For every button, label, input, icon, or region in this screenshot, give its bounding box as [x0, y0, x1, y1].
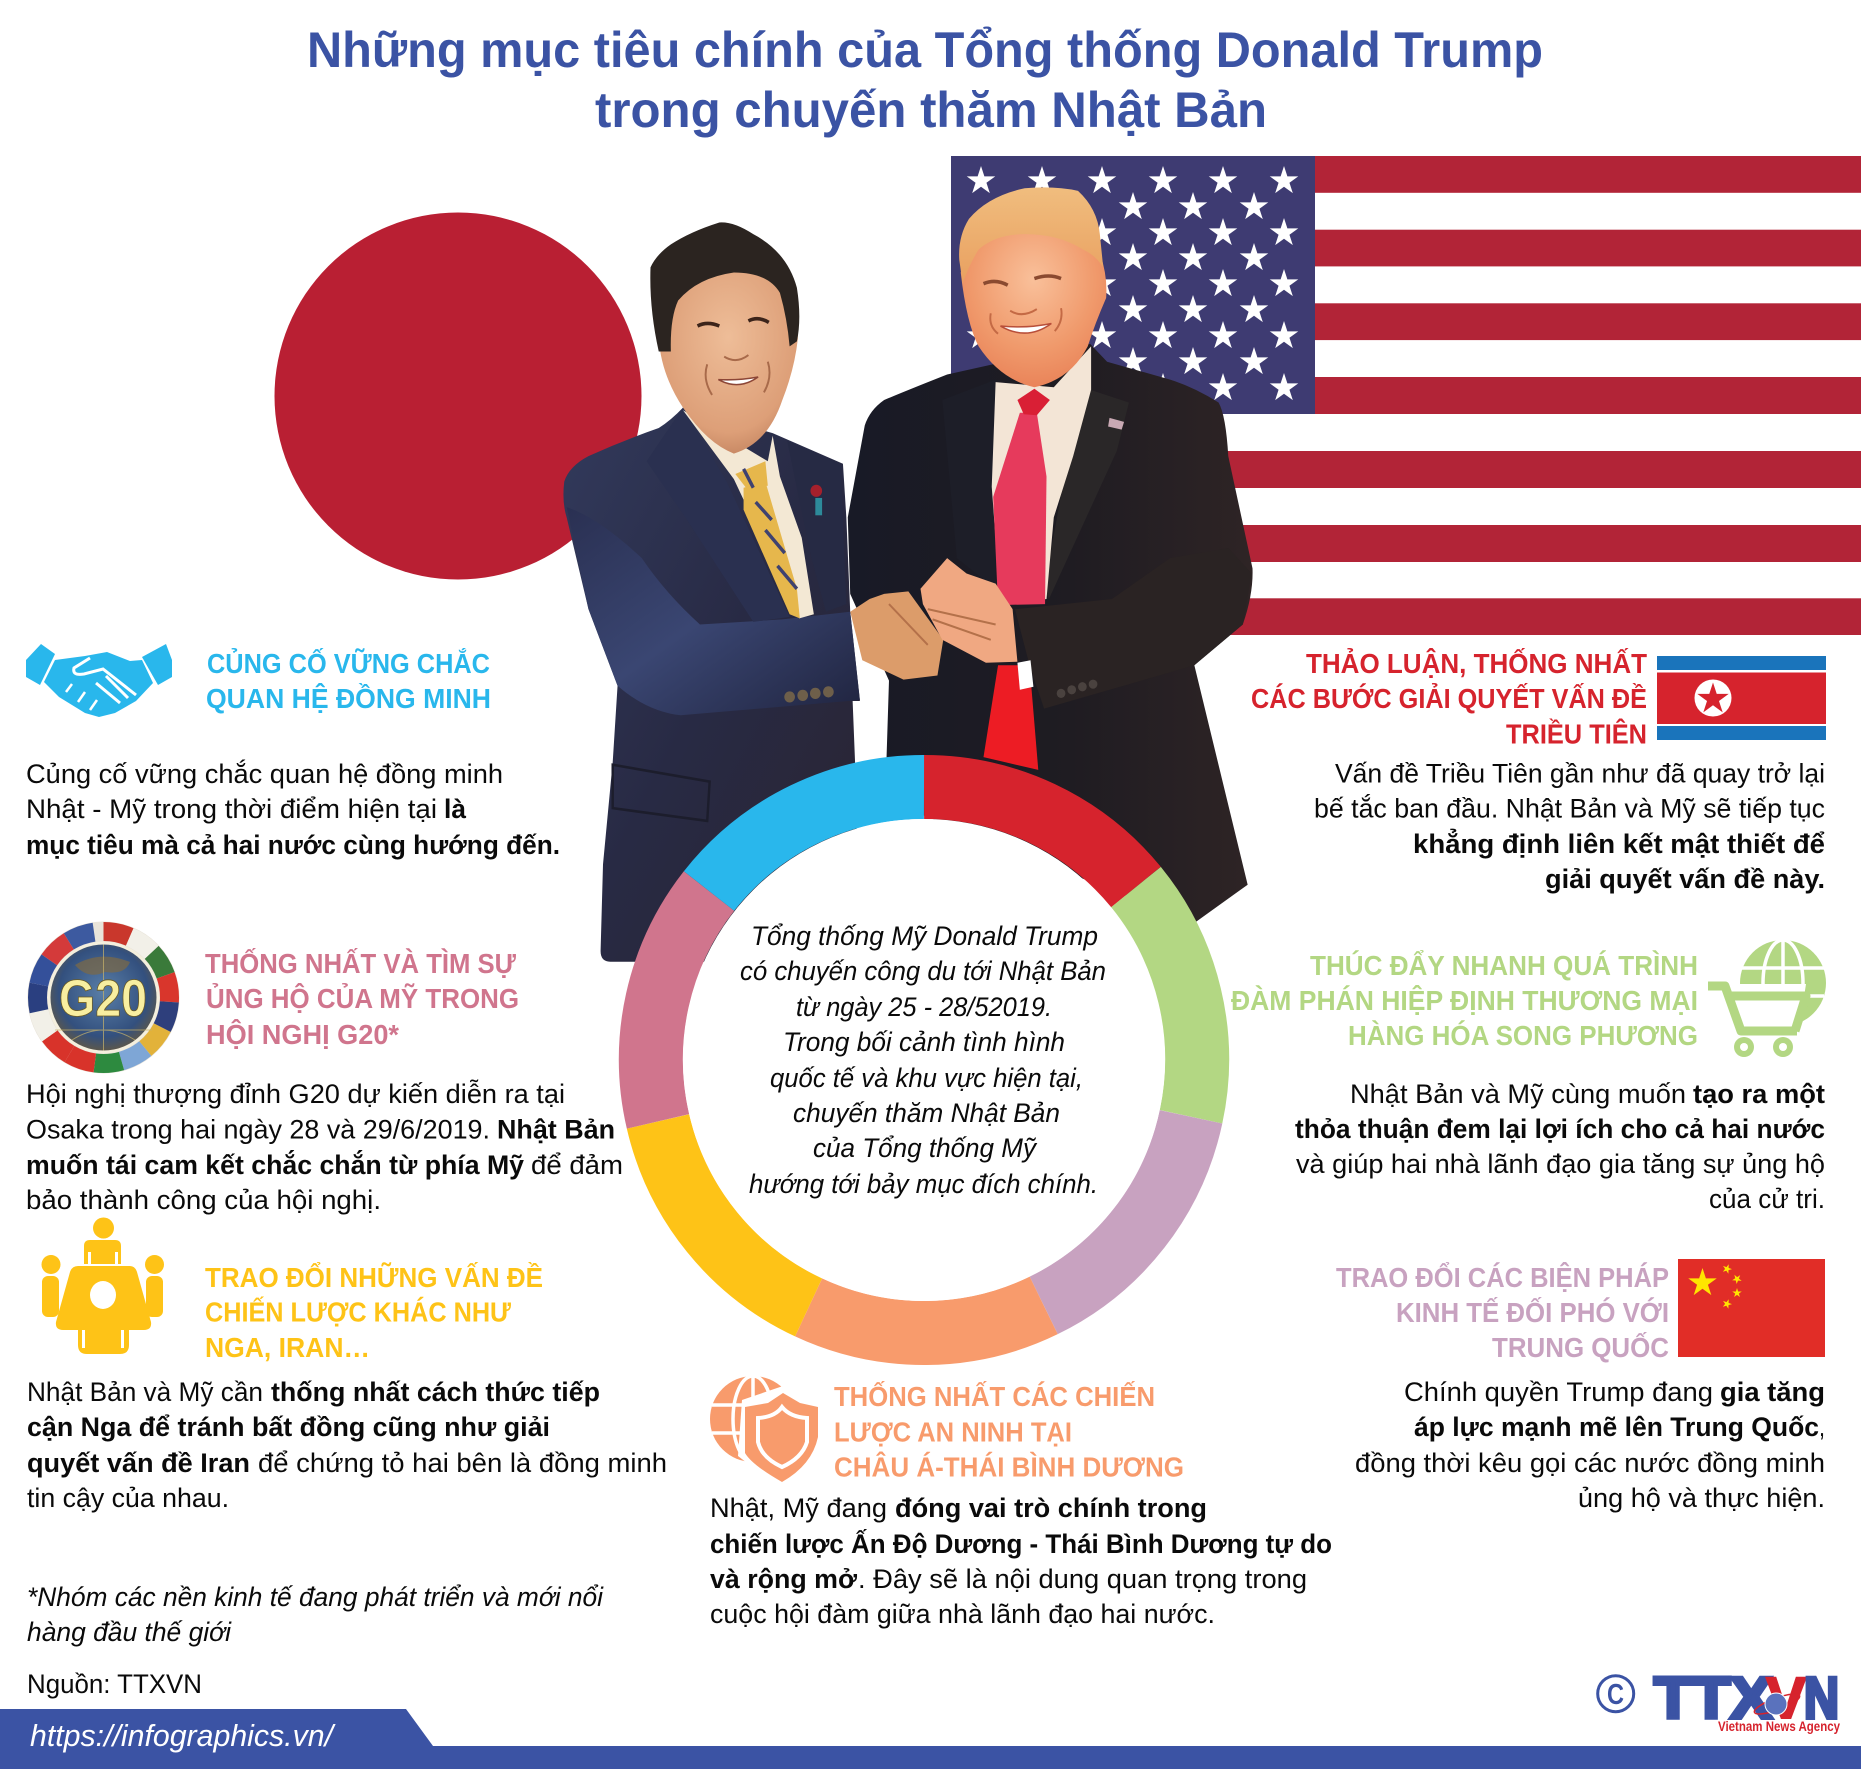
text block: centre intro: của Tổng thống Mỹ: [813, 1133, 1037, 1163]
panel: security goal: [710, 1376, 1332, 1629]
text block: trade: thỏa thuận đem lại lợi ích cho cả hai nước: [1295, 1114, 1825, 1144]
text block: North Korea: giải quyết vấn đề này.: [1545, 864, 1825, 894]
heading: trade: THÚC ĐẨY NHANH QUÁ TRÌNH: [1310, 950, 1698, 981]
heading: alliance: [206, 647, 491, 714]
logo: TTXVN: TTX: [1654, 1666, 1772, 1731]
text block: China: đồng thời kêu gọi các nước đồng minh: [1355, 1448, 1825, 1478]
text block: centre intro: [740, 921, 1106, 1199]
text block: China: Chính quyền Trump đang: [1404, 1377, 1713, 1407]
heading: strategic issues: CHIẾN LƯỢC KHÁC NHƯ: [205, 1296, 512, 1328]
heading: North Korea: TRIỀU TIÊN: [1506, 718, 1647, 750]
heading: trade: HÀNG HÓA SONG PHƯƠNG: [1348, 1020, 1698, 1051]
heading: China: [1336, 1262, 1669, 1363]
text block: G20: để đảm: [531, 1150, 623, 1180]
text block: G20: bảo thành công của hội nghị.: [26, 1185, 381, 1215]
source: Nguồn: TTXVN: [27, 1669, 202, 1699]
text block: G20: Hội nghị thượng đỉnh G20 dự kiến diễn ra tại: [26, 1078, 565, 1109]
text block: G20: [26, 1078, 623, 1215]
text block: alliance: là: [444, 794, 467, 824]
title: Những mục tiêu chính của Tổng thống Donald Trump: [307, 22, 1543, 78]
text block: alliance: mục tiêu mà cả hai nước cùng hướng đến.: [26, 830, 560, 860]
illustration: two leaders shaking hands: [563, 187, 1253, 962]
heading: China: TRUNG QUỐC: [1492, 1331, 1669, 1363]
heading: security: LƯỢC AN NINH TẠI: [834, 1416, 1072, 1448]
icon: North Korean flag: [1657, 656, 1826, 740]
text block: strategic issues: quyết vấn đề Iran: [27, 1448, 250, 1478]
text block: security: chiến lược Ấn Độ Dương - Thái Bình Dương tự do: [710, 1528, 1332, 1559]
logo: TTXVN: C: [1607, 1679, 1624, 1711]
text block: China: ,: [1819, 1412, 1825, 1442]
text block: centre intro: Trong bối cảnh tình hình: [783, 1027, 1065, 1057]
heading: alliance: CỦNG CỐ VỮNG CHẮC: [207, 647, 490, 679]
icon: handshake: [26, 644, 172, 717]
text block: trade: tạo ra một: [1693, 1079, 1825, 1109]
heading: strategic issues: [205, 1262, 543, 1363]
website link: https://infographics.vn/: [30, 1718, 336, 1753]
text block: security: cuộc hội đàm giữa nhà lãnh đạo hai nước.: [710, 1599, 1215, 1629]
handshake: [850, 558, 1017, 680]
text block: trade: của cử tri.: [1709, 1184, 1825, 1214]
panel: G20 goal: [26, 922, 623, 1215]
icon: American flag: [951, 156, 1861, 635]
text block: G20: Nhật Bản: [497, 1114, 615, 1144]
heading: trade: [1231, 950, 1698, 1051]
text block: alliance: [26, 758, 560, 860]
text block: trade: và giúp hai nhà lãnh đạo gia tăng sự ủng hộ: [1296, 1149, 1825, 1179]
icon: meeting table: [42, 1218, 164, 1354]
footnote: [27, 1582, 604, 1647]
panel: China goal: [1336, 1259, 1825, 1513]
text block: strategic issues: [27, 1377, 667, 1513]
text block: North Korea: Vấn đề Triều Tiên gần như đã quay trở lại: [1335, 758, 1825, 788]
text block: centre intro: chuyến thăm Nhật Bản: [793, 1098, 1060, 1128]
heading: strategic issues: TRAO ĐỔI NHỮNG VẤN ĐỀ: [205, 1262, 543, 1293]
panel: strategic issues goal: [27, 1218, 667, 1513]
heading: G20: HỘI NGHỊ G20*: [206, 1018, 399, 1050]
logo: TTXVN: V: [1766, 1666, 1806, 1731]
icon: globe with shield: [710, 1376, 826, 1490]
text block: trade: Nhật Bản và Mỹ cùng muốn: [1350, 1079, 1686, 1109]
heading: G20: THỐNG NHẤT VÀ TÌM SỰ: [205, 947, 517, 979]
heading: security: [834, 1380, 1184, 1482]
text block: North Korea: [1314, 758, 1825, 894]
text block: centre intro: quốc tế và khu vực hiện tại,: [770, 1063, 1083, 1093]
footer banner: [0, 1709, 1861, 1769]
text block: strategic issues: thống nhất cách thức tiếp: [271, 1377, 600, 1407]
heading: trade: ĐÀM PHÁN HIỆP ĐỊNH THƯƠNG MẠI: [1231, 985, 1698, 1016]
text block: strategic issues: để chứng tỏ hai bên là đồng minh: [258, 1448, 667, 1478]
text block: G20: muốn tái cam kết chắc chắn từ phía Mỹ: [26, 1149, 524, 1180]
text block: China: gia tăng: [1720, 1377, 1825, 1407]
text block: security: [710, 1493, 1332, 1629]
panel: alliance goal: [26, 644, 560, 860]
Trump figure: [848, 187, 1253, 923]
icon: G20 globe with flags: [28, 922, 180, 1074]
text block: centre intro: từ ngày 25 - 28/52019.: [796, 992, 1052, 1022]
text block: centre intro: có chuyến công du tới Nhật Bản: [740, 956, 1106, 986]
text block: alliance: Nhật - Mỹ trong thời điểm hiện tại: [26, 794, 437, 824]
panel: trade goal: [1231, 940, 1826, 1214]
heading: G20: [205, 947, 519, 1050]
panel: North Korea goal: [1251, 647, 1826, 894]
text block: alliance: Củng cố vững chắc quan hệ đồng minh: [26, 758, 503, 789]
footnote: *Nhóm các nền kinh tế đang phát triển và mới nổi: [27, 1582, 604, 1612]
heading: North Korea: CÁC BƯỚC GIẢI QUYẾT VẤN ĐỀ: [1251, 682, 1647, 714]
heading: security: THỐNG NHẤT CÁC CHIẾN: [834, 1380, 1155, 1412]
panel: centre intro disc: [683, 819, 1165, 1301]
text block: China: áp lực mạnh mẽ lên Trung Quốc: [1414, 1412, 1819, 1442]
logo: TTXVN: N: [1804, 1666, 1839, 1731]
icon: Japanese flag red disc: [274, 212, 642, 580]
footnote: hàng đầu thế giới: [27, 1617, 232, 1647]
heading: G20: ỦNG HỘ CỦA MỸ TRONG: [206, 982, 519, 1014]
text block: centre intro: Tổng thống Mỹ Donald Trump: [751, 921, 1098, 951]
text block: centre intro: hướng tới bảy mục đích chính.: [749, 1169, 1098, 1199]
heading: strategic issues: NGA, IRAN…: [205, 1332, 370, 1363]
logo: TTXVN: [1598, 1666, 1840, 1734]
text block: G20: Osaka trong hai ngày 28 và 29/6/2019.: [26, 1114, 490, 1144]
heading: North Korea: [1251, 647, 1647, 750]
text block: North Korea: khẳng định liên kết mật thiết để: [1413, 827, 1825, 859]
title: trong chuyến thăm Nhật Bản: [595, 82, 1267, 138]
heading: security: CHÂU Á-THÁI BÌNH DƯƠNG: [834, 1452, 1184, 1482]
title: [307, 22, 1543, 138]
text block: North Korea: bế tắc ban đầu. Nhật Bản và Mỹ sẽ tiếp tục: [1314, 792, 1825, 824]
Abe figure: [563, 222, 860, 962]
text block: security: và rộng mở: [710, 1564, 858, 1594]
text block: trade: [1295, 1079, 1825, 1214]
text block: strategic issues: cận Nga để tránh bất đồng cũng như giải: [27, 1412, 550, 1442]
ring chart: seven coloured goals: [651, 787, 1197, 1333]
heading: alliance: QUAN HỆ ĐỒNG MINH: [206, 683, 491, 714]
text block: strategic issues: tin cậy của nhau.: [27, 1483, 229, 1513]
icon: G20 globe with flags: G20: [59, 970, 147, 1028]
text block: security: đóng vai trò chính trong: [895, 1493, 1207, 1523]
heading: North Korea: THẢO LUẬN, THỐNG NHẤT: [1306, 647, 1647, 679]
icon: Chinese flag: [1678, 1259, 1825, 1357]
heading: China: TRAO ĐỔI CÁC BIỆN PHÁP: [1336, 1262, 1669, 1293]
heading: China: KINH TẾ ĐỐI PHÓ VỚI: [1396, 1296, 1669, 1328]
text block: security: . Đây sẽ là nội dung quan trọng trong: [858, 1564, 1307, 1594]
text block: China: ủng hộ và thực hiện.: [1578, 1483, 1825, 1513]
text block: China: [1355, 1377, 1825, 1513]
text block: security: Nhật, Mỹ đang: [710, 1493, 887, 1523]
text block: strategic issues: Nhật Bản và Mỹ cần: [27, 1377, 263, 1407]
icon: shopping cart with globe: [1708, 940, 1826, 1057]
